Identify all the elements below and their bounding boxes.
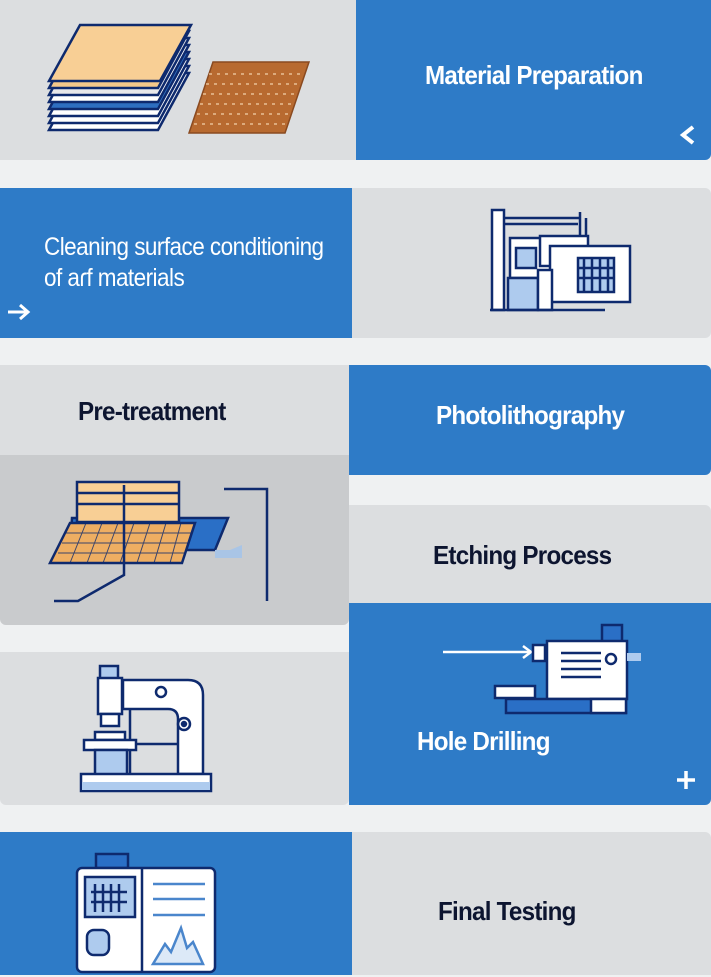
icon: machine [490, 208, 632, 312]
icon: plus [677, 771, 695, 789]
icon: chevron [680, 126, 694, 144]
heading: Material Preparation [425, 60, 643, 90]
text block [44, 233, 324, 292]
text block: of aɾf materials [44, 264, 184, 292]
heading: Final Testing [438, 896, 576, 926]
panel: Final Testing [352, 832, 711, 975]
icon: stacked layers and copper sheet [46, 24, 310, 134]
icon: microscope [80, 664, 212, 792]
heading: Etching Process [433, 540, 611, 570]
icon: laminating board [48, 480, 268, 602]
panel: machine image [352, 188, 711, 338]
icon: drilling machine [443, 624, 641, 714]
heading: Pre-treatment [78, 396, 226, 426]
icon: arrow [8, 304, 30, 320]
panel: microscope image [0, 652, 349, 805]
panel: pretreatment image [0, 455, 349, 625]
panel: Hole Drilling [349, 603, 711, 805]
text block: Cleaning surface conditioning [44, 233, 324, 261]
panel: material image [0, 0, 356, 160]
panel: Pre-treatment [0, 365, 349, 455]
heading: Hole Drilling [417, 726, 550, 756]
panel: Material Preparation [356, 0, 711, 160]
panel: cleaning [0, 188, 352, 338]
heading: Photolithography [436, 400, 624, 430]
panel: testing image [0, 832, 352, 975]
icon: test device [76, 852, 216, 974]
panel: Photolithography [349, 365, 711, 475]
panel: Etching Process [349, 505, 711, 603]
